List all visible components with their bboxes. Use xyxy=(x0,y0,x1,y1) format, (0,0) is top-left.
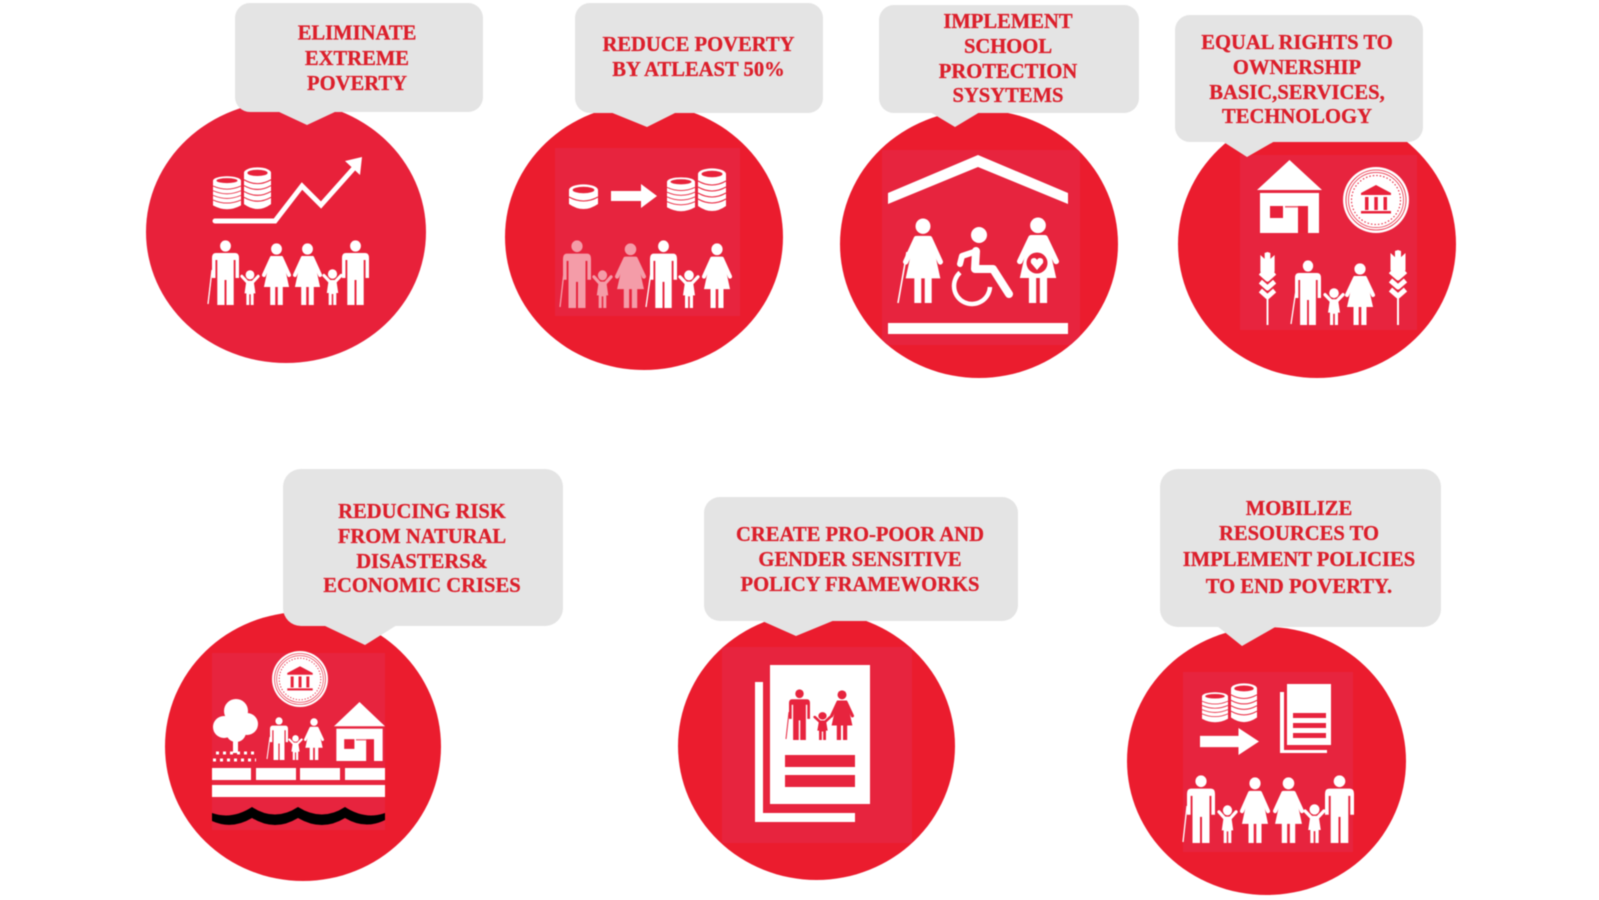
inner icon tile xyxy=(722,647,912,843)
speech bubble xyxy=(704,497,1018,636)
icon: text bars xyxy=(785,755,855,787)
circle badge xyxy=(1127,627,1406,895)
icon: family, half faded xyxy=(560,240,730,308)
icon: policy document xyxy=(1280,684,1331,753)
icon: family group xyxy=(1183,775,1354,843)
speech bubble xyxy=(1175,15,1423,157)
panel: equal rights xyxy=(1175,15,1456,378)
label text: BY ATLEAST 50% xyxy=(612,59,785,81)
circle badge xyxy=(840,110,1118,378)
label text: EQUAL RIGHTS TO xyxy=(1201,32,1393,54)
circle badge xyxy=(146,101,426,363)
label text: DISASTERS& xyxy=(356,551,488,573)
label text: POLICY FRAMEWORKS xyxy=(741,574,979,596)
icon: ground dots xyxy=(213,753,256,760)
icon: pregnant woman xyxy=(1020,218,1056,303)
label text: BASIC,SERVICES, xyxy=(1209,82,1385,104)
label text: SCHOOL xyxy=(964,36,1052,58)
label text: OWNERSHIP xyxy=(1233,57,1361,79)
speech bubble xyxy=(235,3,483,125)
label text: EXTREME xyxy=(305,48,409,70)
inner icon tile xyxy=(555,148,740,316)
inner icon tile xyxy=(1240,155,1417,330)
label text: MOBILIZE xyxy=(1246,498,1352,520)
panel: eliminate extreme poverty xyxy=(146,3,483,363)
icon: elderly woman with cane xyxy=(898,219,940,303)
icon: wheelchair user xyxy=(954,227,1009,304)
circle badge xyxy=(165,612,441,881)
icon: bank seal xyxy=(272,651,328,707)
icon: family on page xyxy=(786,689,852,740)
panel: reducing risk xyxy=(165,469,563,881)
label text: GENDER SENSITIVE xyxy=(758,549,962,571)
inner icon tile xyxy=(882,150,1080,345)
icon: wheat left xyxy=(1260,252,1275,325)
icon: coin stacks xyxy=(213,167,271,209)
label text: CREATE PRO-POOR AND xyxy=(736,524,984,546)
icon: back page xyxy=(755,682,855,822)
label text: FROM NATURAL xyxy=(338,526,506,548)
label text: IMPLEMENT xyxy=(943,11,1073,33)
circle badge xyxy=(505,104,783,370)
label text: TECHNOLOGY xyxy=(1222,106,1372,128)
label text: ELIMINATE xyxy=(298,22,416,44)
label text: PROTECTION xyxy=(939,61,1077,83)
label text: ECONOMIC CRISES xyxy=(323,575,521,597)
inner icon tile xyxy=(1183,672,1353,852)
icon: coins increasing xyxy=(569,168,726,211)
label text: TO END POVERTY. xyxy=(1206,576,1392,598)
label text: SYSYTEMS xyxy=(952,85,1064,107)
circle badge xyxy=(1178,110,1456,378)
icon: coin stacks xyxy=(1202,683,1257,722)
icon: water waves xyxy=(212,807,385,825)
panel: policy frameworks xyxy=(678,497,1018,880)
icon: family xyxy=(1291,260,1373,325)
icon: brick wall xyxy=(212,768,385,797)
icon: family xyxy=(267,717,323,760)
panel: mobilize resources xyxy=(1127,469,1441,895)
icon: family group xyxy=(208,240,369,305)
icon: rising arrow xyxy=(215,157,362,221)
panel: reduce poverty xyxy=(505,3,823,370)
icon: wheat right xyxy=(1390,250,1406,325)
icon: bank seal xyxy=(1343,167,1409,233)
panel: social protection systems xyxy=(840,5,1139,378)
label text: IMPLEMENT POLICIES xyxy=(1183,549,1415,571)
inner icon tile xyxy=(212,653,385,830)
label text: REDUCING RISK xyxy=(338,501,506,523)
circle badge xyxy=(678,612,955,880)
label text: POVERTY xyxy=(307,73,407,95)
icon: arrow xyxy=(1200,728,1259,755)
icon: roof and floor xyxy=(888,155,1068,334)
speech bubble xyxy=(879,5,1139,127)
label text: RESOURCES TO xyxy=(1219,523,1379,545)
speech bubble xyxy=(1160,469,1441,646)
icon: tree xyxy=(213,699,258,753)
icon: house xyxy=(1257,160,1322,233)
label text: REDUCE POVERTY xyxy=(602,34,795,56)
speech bubble xyxy=(575,3,823,127)
icon: house xyxy=(334,702,385,761)
speech bubble xyxy=(283,469,563,645)
icon: front page xyxy=(770,665,870,804)
